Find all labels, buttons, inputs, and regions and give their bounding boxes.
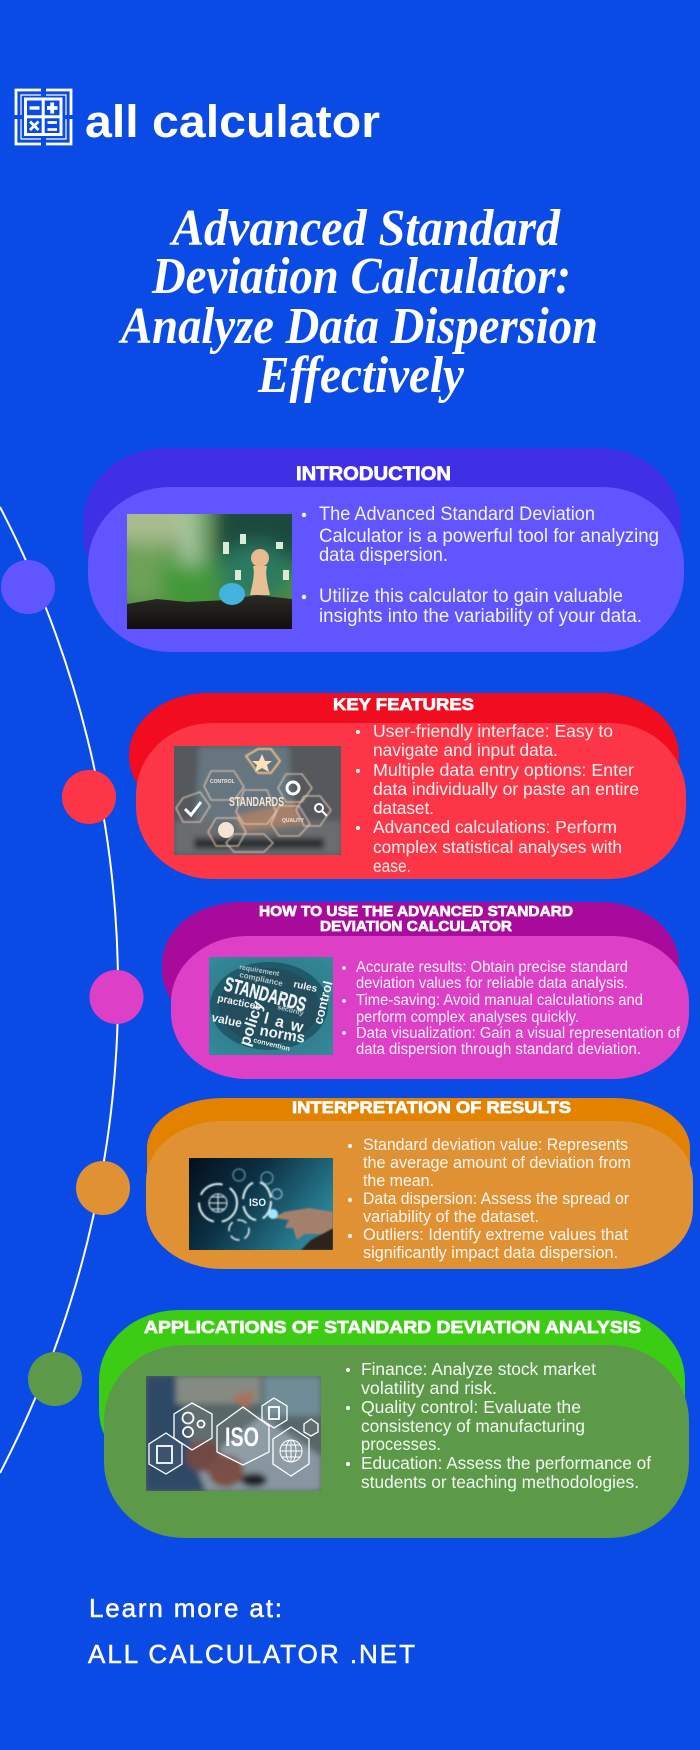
photo: standards hexagons bbox=[174, 746, 341, 855]
heading: APPLICATIONS OF STANDARD DEVIATION ANALYSIS bbox=[144, 1317, 641, 1337]
panel: how to use bbox=[162, 902, 689, 1079]
bullet list: Multiple data entry options: Enter bbox=[373, 760, 634, 780]
panel background back bbox=[129, 693, 679, 818]
bullet list: processes. bbox=[361, 1434, 441, 1454]
node: interpretation bbox=[76, 1161, 130, 1215]
bullet list: The Advanced Standard Deviation bbox=[319, 504, 595, 525]
node: applications bbox=[28, 1352, 82, 1406]
photo: ISO hexagons: ISO bbox=[225, 1422, 259, 1452]
node: how to use bbox=[90, 970, 144, 1024]
bullet list: consistency of manufacturing bbox=[361, 1416, 585, 1436]
photo: standards word cloud: value bbox=[210, 1010, 244, 1030]
icon: calculator grid bbox=[16, 90, 71, 144]
node: key features bbox=[62, 770, 116, 824]
photo: standards word cloud: control bbox=[310, 979, 336, 1026]
wordmark: all calculator bbox=[85, 96, 380, 147]
bullet list: Utilize this calculator to gain valuable bbox=[319, 586, 623, 607]
photo: standards hexagons: QUALITY bbox=[282, 818, 305, 824]
bullet list: deviation values for reliable data analysis. bbox=[356, 975, 628, 992]
bullet list: Quality control: Evaluate the bbox=[361, 1397, 581, 1417]
photo: standards hexagons: STANDARDS bbox=[229, 794, 284, 809]
photo: ISO hexagons bbox=[146, 1376, 321, 1491]
panel: interpretation of results bbox=[146, 1098, 693, 1269]
bullet list: ease. bbox=[373, 856, 411, 876]
bullet list: Standard deviation value: Represents bbox=[363, 1135, 628, 1154]
logo: all calculator bbox=[16, 90, 380, 147]
panel: key features bbox=[129, 693, 686, 879]
panel: applications bbox=[99, 1310, 689, 1538]
photo: standards word cloud: rules bbox=[292, 979, 318, 995]
bullet list: insights into the variability of your data. bbox=[319, 606, 642, 627]
bullet list: complex statistical analyses with bbox=[373, 837, 622, 857]
bullet list: dataset. bbox=[373, 798, 434, 818]
photo: standards word cloud: convention bbox=[253, 1037, 290, 1053]
bullet list: navigate and input data. bbox=[373, 740, 558, 760]
photo: standards word cloud: practices bbox=[216, 993, 262, 1013]
photo: standards hexagons: CONTROL bbox=[210, 779, 235, 785]
bullet list: Finance: Analyze stock market bbox=[361, 1359, 596, 1379]
bullet list: students or teaching methodologies. bbox=[361, 1472, 639, 1492]
heading: KEY FEATURES bbox=[333, 695, 474, 714]
title: Effectively bbox=[257, 347, 465, 404]
bullet list: data dispersion through standard deviation. bbox=[356, 1041, 641, 1058]
bullet list: Time-saving: Avoid manual calculations and bbox=[356, 992, 643, 1009]
bullet list: volatility and risk. bbox=[361, 1378, 497, 1398]
photo: standards word cloud: norms bbox=[258, 1022, 306, 1047]
photo: standards word cloud bbox=[209, 957, 336, 1055]
bullet list: Outliers: Identify extreme values that bbox=[363, 1225, 628, 1244]
photo: standards word cloud: policy bbox=[237, 999, 267, 1048]
bullet list: Advanced calculations: Perform bbox=[373, 817, 617, 837]
timeline curve bbox=[0, 507, 118, 1473]
bullet list: Data dispersion: Assess the spread or bbox=[363, 1189, 629, 1208]
bullet list: Calculator is a powerful tool for analyzing bbox=[319, 526, 659, 547]
photo: standards word cloud: requirement bbox=[239, 964, 280, 978]
title: Analyze Data Dispersion bbox=[118, 298, 598, 355]
panel: introduction bbox=[83, 448, 684, 652]
panel background front bbox=[136, 723, 686, 879]
panel background front bbox=[146, 1121, 693, 1269]
title: Advanced Standard bbox=[169, 200, 561, 257]
bullet list bbox=[346, 1359, 651, 1492]
panel background back bbox=[147, 1098, 690, 1223]
heading: INTERPRETATION OF RESULTS bbox=[292, 1098, 571, 1117]
photo: seedling pawn bbox=[127, 514, 292, 629]
bullet list bbox=[302, 504, 659, 627]
panel background front bbox=[171, 936, 689, 1079]
photo: ISO touch bbox=[189, 1158, 333, 1250]
bullet list: User-friendly interface: Easy to bbox=[373, 721, 613, 741]
panel background back bbox=[83, 448, 681, 608]
bullet list bbox=[356, 721, 639, 876]
bullet list: the mean. bbox=[363, 1171, 434, 1190]
panel background front bbox=[88, 487, 684, 652]
heading: HOW TO USE THE ADVANCED STANDARD bbox=[259, 903, 573, 920]
heading: DEVIATION CALCULATOR bbox=[320, 918, 512, 935]
bullet list: Education: Assess the performance of bbox=[361, 1453, 651, 1473]
bullet list: Data visualization: Gain a visual representation of bbox=[356, 1025, 681, 1042]
title: Deviation Calculator: bbox=[151, 248, 571, 305]
footer call to action: Learn more at: bbox=[89, 1593, 282, 1623]
photo: ISO touch: ISO bbox=[249, 1197, 266, 1209]
bullet list: significantly impact data dispersion. bbox=[363, 1243, 618, 1262]
bullet list: variability of the dataset. bbox=[363, 1207, 539, 1226]
heading bbox=[259, 903, 573, 935]
heading: INTRODUCTION bbox=[296, 463, 451, 485]
node: introduction bbox=[1, 560, 55, 614]
photo: standards word cloud: compliance bbox=[239, 970, 284, 988]
panel background front bbox=[104, 1345, 689, 1538]
panel background back bbox=[99, 1310, 685, 1480]
title bbox=[118, 200, 598, 404]
panel background back bbox=[162, 902, 679, 1032]
footer call to action: ALL CALCULATOR .NET bbox=[88, 1639, 415, 1669]
photo: standards word cloud: law bbox=[262, 1010, 305, 1037]
bullet list: Accurate results: Obtain precise standard bbox=[356, 959, 628, 976]
bullet list: data individually or paste an entire bbox=[373, 779, 639, 799]
bullet list: perform complex analyses quickly. bbox=[356, 1009, 579, 1026]
bullet list: the average amount of deviation from bbox=[363, 1153, 631, 1172]
footer call to action bbox=[88, 1593, 415, 1669]
bullet list: data dispersion. bbox=[319, 545, 448, 566]
bullet list bbox=[348, 1135, 631, 1262]
bullet list bbox=[342, 959, 681, 1058]
photo: standards word cloud: security bbox=[277, 1004, 304, 1017]
